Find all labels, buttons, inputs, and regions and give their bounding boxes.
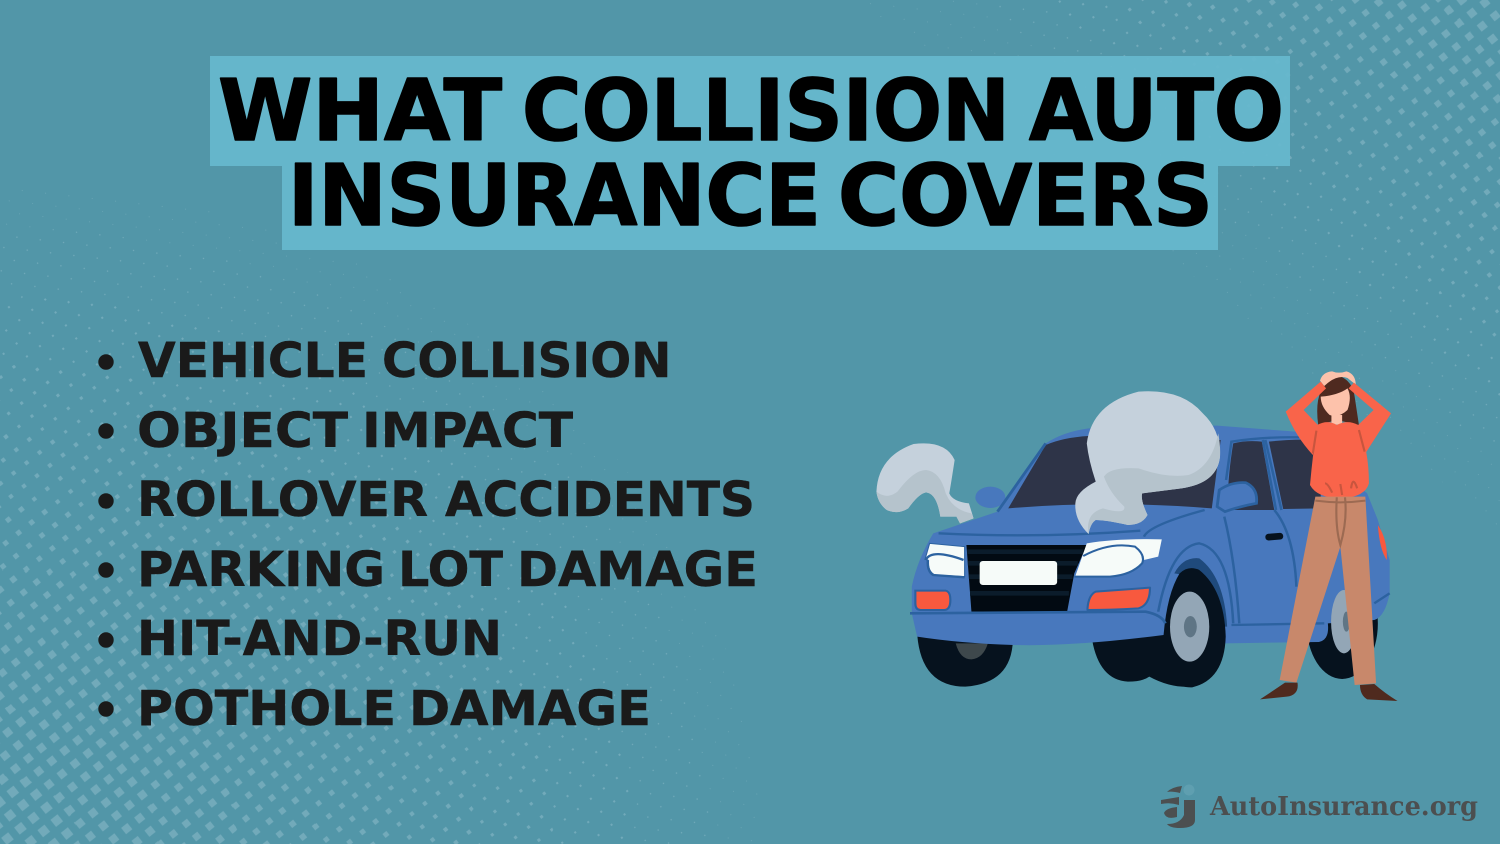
icon: stressed woman: [1260, 371, 1397, 701]
logo: AutoInsurance.org: [1161, 784, 1478, 828]
icon: small smoke cloud: [876, 443, 974, 523]
item: parking lot damage: [98, 542, 758, 598]
item: parking lot damage: DAMAGE: [517, 542, 758, 598]
title line 2: INSURANCE: [288, 147, 821, 245]
title line 1: AUTO: [1029, 62, 1284, 160]
item: parking lot damage: LOT: [398, 542, 503, 598]
item: hit-and-run: HIT-AND-RUN: [137, 611, 502, 667]
title: [210, 56, 1290, 250]
item: vehicle collision: COLLISION: [382, 333, 672, 389]
illustration: broken-down car with woman: [876, 371, 1397, 701]
item: rollover accidents: [98, 472, 755, 528]
item: object impact: OBJECT: [137, 403, 348, 459]
item: object impact: [98, 403, 573, 459]
item: parking lot damage: PARKING: [137, 542, 385, 598]
item: vehicle collision: VEHICLE: [138, 333, 368, 389]
icon: smoking blue car: [876, 391, 1390, 687]
title line 1: COLLISION: [522, 62, 1010, 160]
item: rollover accidents: ROLLOVER: [137, 472, 428, 528]
item: object impact: IMPACT: [362, 403, 573, 459]
logo wordmark: AutoInsurance.org: [1209, 792, 1478, 822]
icon: logo mark: [1161, 784, 1195, 828]
item: pothole damage: DAMAGE: [409, 681, 651, 737]
icon: large smoke cloud: [1075, 391, 1220, 534]
item: rollover accidents: ACCIDENTS: [445, 472, 755, 528]
title line 2: COVERS: [838, 147, 1213, 245]
item: pothole damage: [98, 681, 651, 737]
item: pothole damage: POTHOLE: [137, 681, 396, 737]
bullet list of covered events: [98, 333, 758, 737]
item: vehicle collision: [98, 333, 672, 389]
title line 1: WHAT: [218, 62, 502, 160]
